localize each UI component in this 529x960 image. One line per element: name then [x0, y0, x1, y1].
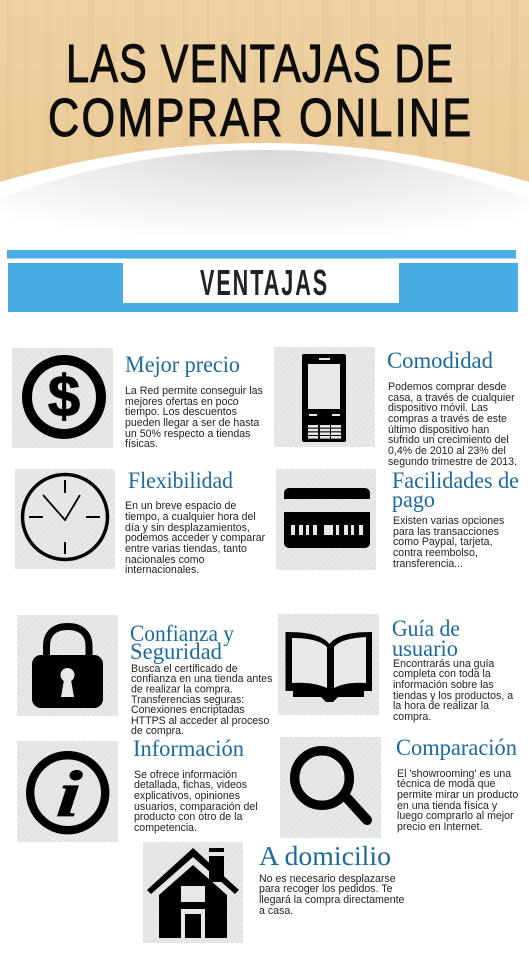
text: comodidad: Podemos comprar desde — [388, 381, 506, 393]
icon: mobile phone — [274, 347, 375, 447]
text: flexibilidad: internacionales. — [125, 564, 199, 576]
panel: confianza y seguridad — [17, 615, 272, 737]
panel: comodidad — [274, 347, 517, 468]
text: flexibilidad — [125, 500, 266, 576]
text: confianza y seguridad: de realizar la compra. — [131, 684, 233, 696]
text: confianza y seguridad: de compra. — [131, 725, 184, 737]
text: a domicilio: a casa. — [259, 905, 293, 917]
text: información: competencia. — [134, 822, 197, 834]
heading: facilidades de pago — [392, 468, 519, 512]
icon: magnifying glass — [280, 737, 381, 838]
text: flexibilidad: podemos acceder y comparar — [125, 532, 266, 544]
text: mejor precio: La Red permite conseguir las — [125, 385, 263, 397]
text: a domicilio — [259, 873, 405, 917]
text: información — [134, 769, 258, 834]
icon: credit card — [276, 469, 376, 570]
text: información: usuarios, comparación del — [134, 801, 258, 813]
icon: dollar coin: $ — [48, 364, 80, 429]
text: flexibilidad: entre varias tiendas, tanto — [125, 543, 247, 555]
icon: dollar coin — [12, 348, 113, 448]
panel: comparación — [280, 735, 518, 838]
heading: a domicilio: A domicilio — [259, 841, 391, 871]
text: comparación: El 'showrooming' es una — [397, 768, 511, 780]
heading: flexibilidad: Flexibilidad — [128, 468, 233, 493]
heading: información: Información — [133, 736, 244, 761]
icon: information: i — [54, 758, 85, 831]
text: guía de usuario: Encontrarás una guía — [393, 658, 494, 670]
text: comodidad: compras a través de este — [388, 413, 507, 425]
text: flexibilidad: tiempo, a cualquier hora del — [125, 511, 256, 523]
text: comodidad: dispositivo móvil. Las — [388, 402, 488, 414]
panel: facilidades de pago — [276, 468, 519, 570]
text: comodidad: 0,4% de 2010 al 23% del — [388, 445, 506, 457]
text: guía de usuario: información sobre las — [393, 679, 494, 691]
text: comparación: en una tienda física y — [397, 800, 498, 812]
text: comodidad: último dispositivo han — [388, 424, 489, 436]
icon: open book — [278, 614, 379, 715]
text: guía de usuario: la hora de realizar la — [393, 700, 489, 712]
text: confianza y seguridad: Busca el certificado de — [131, 663, 238, 675]
text: confianza y seguridad — [131, 663, 272, 737]
text: facilidades de pago: contra reembolso, — [393, 547, 478, 559]
heading: facilidades de pago: Facilidades de — [392, 468, 519, 493]
text: mejor precio: mejores ofertas en poco — [125, 396, 239, 408]
wood header background — [0, 0, 529, 215]
heading: confianza y seguridad: Confianza y — [130, 621, 234, 646]
text: comparación — [397, 768, 518, 833]
icon: padlock — [17, 615, 118, 716]
icon: house — [143, 842, 243, 943]
panel: flexibilidad — [15, 468, 266, 576]
text: facilidades de pago: Existen varias opciones — [393, 515, 504, 527]
heading: guía de usuario — [392, 616, 460, 661]
text: comparación: técnica de moda que — [397, 778, 495, 790]
text: comparación: luego comprarlo al mejor — [397, 810, 514, 822]
text: mejor precio: físicas. — [125, 438, 158, 450]
text: información: explicativos, opiniones — [134, 790, 240, 802]
text: facilidades de pago: como Paypal, tarjeta, — [393, 536, 493, 548]
icon: clock — [15, 469, 115, 569]
panel: guía de usuario — [278, 614, 513, 723]
text: facilidades de pago — [393, 515, 504, 570]
text: confianza y seguridad: HTTPS al acceder al proceso — [131, 715, 269, 727]
heading: guía de usuario: Guía de — [392, 616, 460, 641]
text: flexibilidad: En un breve espacio de — [125, 500, 236, 512]
heading: confianza y seguridad — [130, 621, 234, 664]
text: a domicilio: llegará la compra directamente — [259, 894, 405, 906]
heading: confianza y seguridad: Seguridad — [130, 639, 222, 664]
text: comodidad — [388, 381, 517, 468]
text: flexibilidad: nacionales como — [125, 554, 205, 566]
text: facilidades de pago: transferencia... — [393, 558, 463, 570]
text: comodidad: casa, a través de cualquier — [388, 392, 515, 404]
section banner: ventajas: VENTAJAS — [200, 263, 327, 303]
heading: guía de usuario: usuario — [392, 636, 458, 661]
text: mejor precio: tiempo. Los descuentos — [125, 406, 237, 418]
panel: información — [17, 736, 258, 842]
heading: facilidades de pago: pago — [392, 487, 435, 512]
text: comodidad: segundo trimestre de 2013. — [388, 456, 517, 468]
section banner: ventajas — [7, 250, 518, 312]
text: comodidad: sufrido un crecimiento del — [388, 434, 509, 446]
text: información: detallada, fichas, videos — [134, 779, 247, 791]
text: mejor precio: pueden llegar a ser de hasta — [125, 417, 259, 429]
title — [48, 34, 471, 148]
icon: information — [17, 741, 118, 842]
panel: a domicilio — [143, 841, 405, 943]
panel: mejor precio — [12, 348, 263, 450]
text: confianza y seguridad: Conexiones encriptadas — [131, 704, 245, 716]
text: guía de usuario: tiendas y los productos, a — [393, 690, 513, 702]
text: confianza y seguridad: confianza en una tienda antes — [131, 673, 272, 685]
text: mejor precio: un 50% respecto a tiendas — [125, 428, 250, 440]
text: comparación: precio en Internet. — [397, 821, 482, 833]
text: guía de usuario: compra. — [393, 711, 431, 723]
text: a domicilio: No es necesario desplazarse — [259, 873, 396, 885]
text: flexibilidad: día y sin desplazamientos, — [125, 522, 250, 534]
title: LAS VENTAJAS DE — [66, 34, 453, 94]
text: información: producto con otro de la — [134, 811, 242, 823]
text: guía de usuario: completa con toda la — [393, 668, 491, 680]
text: mejor precio — [125, 385, 263, 450]
text: guía de usuario — [393, 658, 513, 723]
text: facilidades de pago: para las transacciones — [393, 526, 499, 538]
heading: comparación: Comparación — [396, 735, 517, 760]
heading: mejor precio: Mejor precio — [125, 352, 240, 377]
heading: comodidad: Comodidad — [387, 348, 493, 373]
text: confianza y seguridad: Transferencias seguras: — [131, 694, 244, 706]
title: COMPRAR ONLINE — [48, 89, 471, 148]
text: información: Se ofrece información — [134, 769, 237, 781]
text: a domicilio: para recoger los pedidos. Te — [259, 883, 393, 895]
text: comparación: permite mirar un producto — [397, 789, 518, 801]
